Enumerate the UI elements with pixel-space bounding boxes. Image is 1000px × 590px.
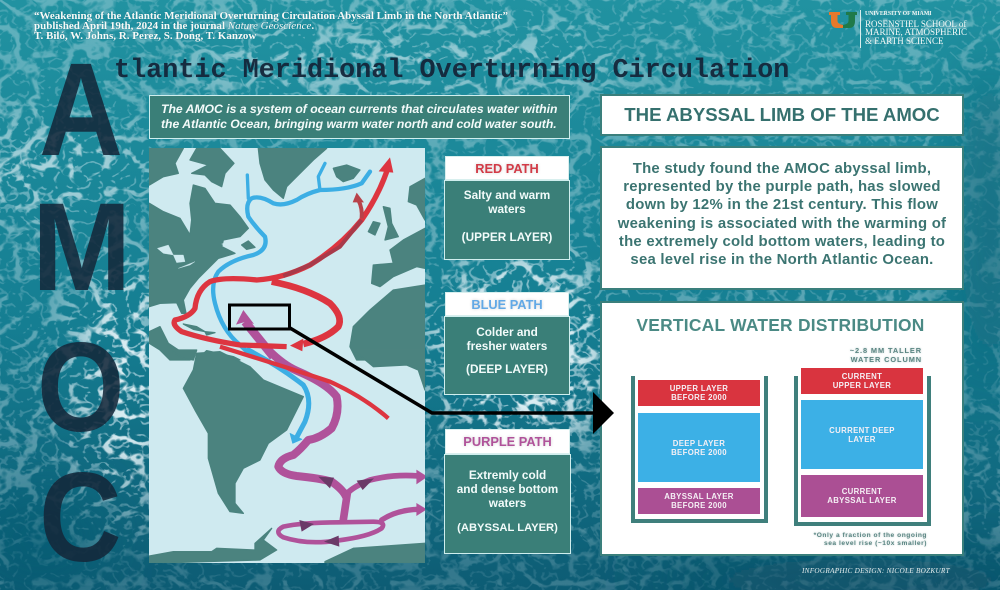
- red path heading: RED PATH: [475, 161, 539, 176]
- purple path direction markers: [299, 477, 374, 547]
- citation text: T. Biló, W. Johns, R. Perez, S. Dong, T. Kanzow: [34, 30, 256, 42]
- land north: [149, 148, 425, 360]
- blue path description: fresher waters: [467, 338, 547, 352]
- purple path description: and dense bottom: [457, 482, 558, 496]
- logo divider and wordmark: ROSENSTIEL SCHOOL of: [865, 18, 966, 28]
- purple path description: waters: [489, 496, 526, 510]
- red path description: (UPPER LAYER): [462, 230, 552, 244]
- abyssal layer before 2000: [638, 488, 760, 514]
- panel: abyssal limb title: THE ABYSSAL LIMB OF THE AMOC: [624, 104, 940, 125]
- land south: [149, 350, 425, 563]
- panel: study finding: weakening is associated with the warming of: [618, 216, 946, 232]
- right column: current: [794, 368, 931, 526]
- connector arrow: [290, 326, 614, 434]
- deep layer before 2000: DEEP LAYER: [673, 438, 725, 448]
- heading: big AMOC letters and title: A: [39, 36, 123, 184]
- intro text panel: [149, 95, 570, 139]
- intro text panel: the Atlantic Ocean, bringing warm water north and cold water south.: [161, 116, 557, 130]
- purple path heading: [445, 429, 570, 454]
- current deep layer: CURRENT DEEP: [829, 426, 895, 434]
- icon: U mark: [829, 12, 857, 28]
- blue path description: [444, 316, 570, 395]
- current abyssal layer: ABYSSAL LAYER: [827, 496, 897, 505]
- footnote: sea level rise (~10x smaller): [824, 540, 927, 547]
- panel: study finding: down by 12% in the 21st century. This flow: [626, 197, 938, 213]
- taller water column note: [850, 346, 922, 364]
- purple path description: Extremly cold: [469, 468, 546, 482]
- panel: study finding: represented by the purple path, has slowed: [623, 179, 941, 195]
- left column: before 2000: [631, 376, 768, 523]
- container walls: [631, 376, 635, 523]
- abyssal layer before 2000: BEFORE 2000: [671, 501, 727, 510]
- red path heading: [445, 156, 569, 180]
- footnote: *Only a fraction of the ongoing: [814, 532, 927, 539]
- purple path description: (ABYSSAL LAYER): [457, 522, 558, 534]
- purple path: [268, 350, 427, 542]
- panel: study finding: the extremely cold bottom waters, leading to: [619, 234, 945, 250]
- panel: red path: [444, 156, 570, 260]
- chart heading: VERTICAL WATER DISTRIBUTION: [636, 315, 925, 335]
- logo divider and wordmark: & EARTH SCIENCE: [865, 36, 943, 46]
- panel: abyssal limb title: [600, 94, 964, 136]
- current upper layer: CURRENT: [842, 372, 882, 381]
- heading: big AMOC letters and title: M: [32, 176, 131, 317]
- current deep layer: [801, 400, 923, 469]
- heading: big AMOC letters and title: O: [37, 316, 125, 459]
- current abyssal layer: CURRENT: [842, 487, 882, 496]
- deep layer before 2000: [638, 413, 760, 482]
- university logo: [829, 10, 967, 48]
- intro text panel: The AMOC is a system of ocean currents that circulates water within: [161, 102, 557, 116]
- abyssal layer before 2000: ABYSSAL LAYER: [664, 492, 734, 501]
- panel: blue path: [444, 292, 570, 395]
- taller water column note: ~2.8 MM TALLER: [850, 346, 922, 355]
- panel: study finding: sea level rise in the North Atlantic Ocean.: [630, 252, 934, 268]
- deep layer before 2000: BEFORE 2000: [671, 448, 727, 456]
- citation text: published April 19th, 2024 in the journal Nature Geoscience.: [34, 20, 314, 32]
- current abyssal layer: [801, 475, 923, 517]
- logo divider and wordmark: [860, 10, 970, 48]
- logo divider and wordmark: MARINE, ATMOSPHERIC: [865, 27, 967, 37]
- citation text: “Weakening of the Atlantic Meridional Overturning Circulation Abyssal Limb in the North Atlantic”: [34, 10, 508, 22]
- blue path heading: [445, 292, 569, 316]
- current upper layer: [801, 368, 923, 394]
- red path: [174, 157, 393, 418]
- current upper layer: UPPER LAYER: [833, 381, 891, 390]
- panel: purple path: [444, 429, 571, 554]
- heading: big AMOC letters and title: C: [39, 445, 122, 588]
- citation text: [34, 10, 508, 42]
- red path description: Salty and warm: [464, 188, 550, 202]
- footnote: [813, 532, 927, 547]
- blue path: [213, 163, 370, 443]
- container walls: [794, 376, 798, 526]
- taller water column note: WATER COLUMN: [851, 355, 922, 364]
- current deep layer: LAYER: [848, 434, 876, 444]
- design credit: INFOGRAPHIC DESIGN: NICOLE BOZKURT: [802, 567, 950, 575]
- map highlight box: [230, 305, 290, 329]
- panel: study finding: [600, 146, 964, 290]
- purple path heading: PURPLE PATH: [463, 434, 552, 449]
- blue path heading: BLUE PATH: [471, 297, 543, 312]
- panel: vertical water distribution: [600, 301, 964, 556]
- purple path description: [444, 454, 571, 554]
- red path description: [444, 180, 570, 260]
- upper layer before 2000: BEFORE 2000: [671, 393, 727, 402]
- upper layer before 2000: UPPER LAYER: [670, 384, 728, 393]
- blue path description: (DEEP LAYER): [466, 362, 548, 376]
- upper layer before 2000: [638, 380, 760, 406]
- panel: study finding: The study found the AMOC abyssal limb,: [633, 161, 931, 177]
- logo divider and wordmark: UNIVERSITY OF MIAMI: [865, 11, 932, 17]
- map of Atlantic currents: [149, 148, 425, 563]
- heading: big AMOC letters and title: tlantic Meridional Overturning Circulation: [114, 56, 789, 86]
- blue path description: Colder and: [476, 325, 538, 339]
- red path description: waters: [488, 202, 526, 216]
